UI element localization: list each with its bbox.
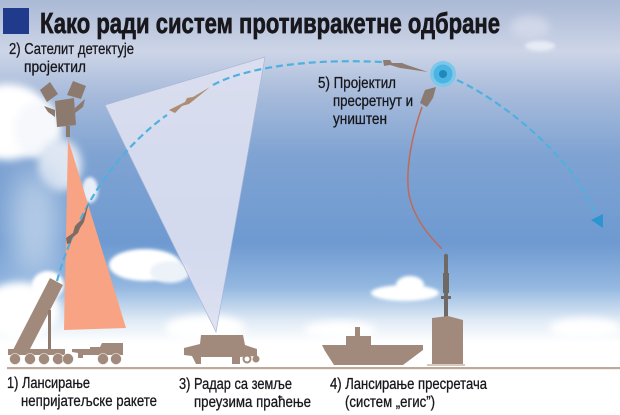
label: step 1 launch: [7, 375, 157, 410]
label: step 1 launch: непријатељске ракете: [21, 393, 157, 410]
enemy missile trajectory: [57, 61, 596, 281]
interceptor launch tower: [427, 254, 465, 366]
label: step 4 interceptor launch: [330, 376, 487, 411]
label: step 4 interceptor launch: (систем „егис”): [345, 394, 435, 411]
label: step 2 satellite: 2) Сателит детектује: [9, 41, 134, 58]
label: step 5 intercept: пресретнут и: [333, 93, 413, 110]
explosion: [430, 61, 456, 87]
satellite sensor beam: [64, 139, 126, 330]
label: step 3 radar: 3) Радар са земље: [179, 376, 292, 393]
label: step 1 launch: 1) Лансирање: [7, 375, 90, 392]
trajectory arrowhead: [591, 214, 603, 228]
clouds: [0, 16, 620, 341]
label: step 5 intercept: 5) Пројектил: [318, 75, 396, 92]
interceptor missile: [420, 87, 436, 107]
interceptor trail: [408, 107, 442, 249]
missile: midcourse: [169, 87, 210, 113]
label: step 5 intercept: [318, 75, 413, 128]
label: step 3 radar: [179, 376, 311, 411]
ship: [322, 327, 423, 365]
label: step 5 intercept: уништен: [333, 111, 387, 128]
missile: boost phase: [66, 202, 89, 244]
title marker square: [3, 8, 29, 34]
missile launcher vehicle: [8, 278, 123, 364]
label: step 4 interceptor launch: 4) Лансирање пресретача: [330, 376, 487, 393]
label: step 2 satellite: [9, 41, 134, 76]
ground line: [7, 367, 620, 369]
satellite: [40, 81, 86, 137]
white ground area: [0, 369, 620, 415]
label: step 3 radar: преузима праћење: [194, 394, 311, 411]
radar coverage cone: [105, 57, 265, 332]
label: step 2 satellite: пројектил: [24, 59, 86, 76]
ground radar vehicle: [184, 335, 260, 364]
missile: near intercept: [383, 60, 428, 72]
